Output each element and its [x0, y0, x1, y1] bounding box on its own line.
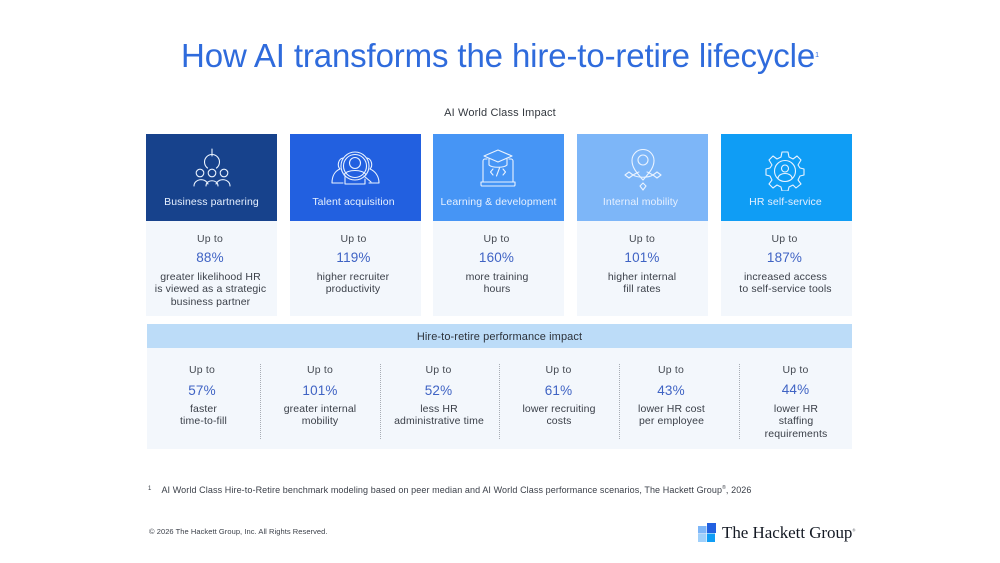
description: productivity: [326, 283, 380, 295]
card: Learning & development: [433, 134, 564, 221]
description: time-to-fill: [180, 415, 227, 427]
card: HR self-service: [721, 134, 852, 221]
prefix: Up to: [197, 233, 223, 245]
description: lower HR: [774, 403, 818, 415]
value: 44%: [782, 382, 809, 397]
card label: Talent acquisition: [312, 196, 395, 208]
description: lower HR cost: [638, 403, 705, 415]
description: [739, 271, 832, 295]
panel: Internal mobility result: [577, 221, 708, 316]
icon: graduation cap and laptop: [480, 150, 516, 186]
icon: magnifier over person: [331, 152, 380, 184]
description: mobility: [302, 415, 338, 427]
metric: time-to-fill: [180, 364, 227, 427]
value: 61%: [545, 383, 572, 398]
metric: internal mobility: [284, 364, 356, 427]
metric: 160%: [479, 250, 514, 265]
description: requirements: [765, 428, 827, 440]
prefix: Up to: [545, 364, 572, 376]
metric: 101%: [624, 250, 660, 265]
description: costs: [546, 415, 572, 427]
icon: gear with person: [765, 152, 805, 191]
prefix: Up to: [658, 364, 684, 376]
prefix: Up to: [189, 364, 215, 376]
description: is viewed as a strategic: [155, 283, 266, 295]
card label: HR self-service: [749, 196, 822, 208]
description: less HR: [420, 403, 458, 415]
panel: Talent acquisition result: [290, 221, 421, 316]
value: 43%: [657, 383, 685, 398]
value: 101%: [302, 383, 338, 398]
description: fill rates: [623, 283, 661, 295]
logo wordmark: The Hackett Group®: [722, 523, 855, 542]
description: [317, 271, 389, 295]
description: more training: [466, 271, 528, 283]
description: higher recruiter: [317, 271, 389, 283]
description: [522, 403, 596, 427]
description: [765, 403, 827, 440]
card: Talent acquisition: [290, 134, 421, 221]
panel: HR self-service result: [721, 221, 852, 316]
prefix: Up to: [340, 233, 367, 245]
description: [638, 403, 705, 427]
copyright: © 2026 The Hackett Group, Inc. All Rights Reserved.: [149, 527, 328, 536]
description: increased access: [744, 271, 827, 283]
value: 57%: [188, 383, 216, 398]
card: Internal mobility: [577, 134, 708, 221]
metric: HR cost per employee: [638, 364, 705, 427]
title: How AI transforms the hire-to-retire lifecycle1: [181, 37, 819, 74]
icon: people network: [194, 148, 230, 186]
prefix: Up to: [771, 233, 798, 245]
description: staffing: [779, 415, 813, 427]
metric: 119%: [336, 250, 371, 265]
prefix: Up to: [629, 233, 655, 245]
subheading: AI World Class Impact: AI World Class Impact: [444, 107, 556, 119]
description: greater internal: [284, 403, 356, 415]
card label: Learning & development: [440, 196, 557, 208]
description: [608, 271, 676, 295]
footnote: 1 AI World Class Hire-to-Retire benchmark modeling based on peer median and AI World Class performance scenarios, The Hackett Group®, 2026: [148, 485, 752, 495]
description: hours: [484, 283, 510, 295]
description: administrative time: [394, 415, 484, 427]
prefix: Up to: [425, 364, 452, 376]
description: [180, 403, 227, 427]
description: [284, 403, 356, 427]
card label: Business partnering: [164, 196, 259, 208]
metric: 187%: [767, 250, 802, 265]
metric: recruiting costs: [522, 364, 596, 427]
description: [155, 271, 266, 308]
card: Business partnering: [146, 134, 277, 221]
description: higher internal: [608, 271, 676, 283]
description: faster: [190, 403, 217, 415]
panel: performance impact metrics: [147, 348, 852, 449]
value: 52%: [425, 383, 452, 398]
description: per employee: [639, 415, 704, 427]
prefix: Up to: [782, 364, 809, 376]
logo mark: [698, 523, 716, 542]
description: [466, 271, 528, 295]
metric: HR administrative time: [394, 364, 484, 427]
description: [394, 403, 484, 427]
banner: Hire-to-retire performance impact: [147, 324, 852, 348]
logo: The Hackett Group: [698, 523, 856, 542]
card label: Internal mobility: [603, 196, 678, 208]
description: to self-service tools: [739, 283, 832, 295]
icon: map pin with arrows: [624, 149, 662, 191]
panel: Business partnering result: [146, 221, 277, 316]
description: lower recruiting: [522, 403, 596, 415]
description: greater likelihood HR: [160, 271, 261, 283]
panel: Learning & development result: [433, 221, 564, 316]
metric: HR staffing requirements: [765, 364, 827, 440]
prefix: Up to: [483, 233, 510, 245]
prefix: Up to: [307, 364, 333, 376]
description: business partner: [171, 296, 250, 308]
metric: 88%: [196, 250, 224, 265]
banner: Hire-to-retire performance impact: Hire-to-retire performance impact: [417, 331, 582, 343]
